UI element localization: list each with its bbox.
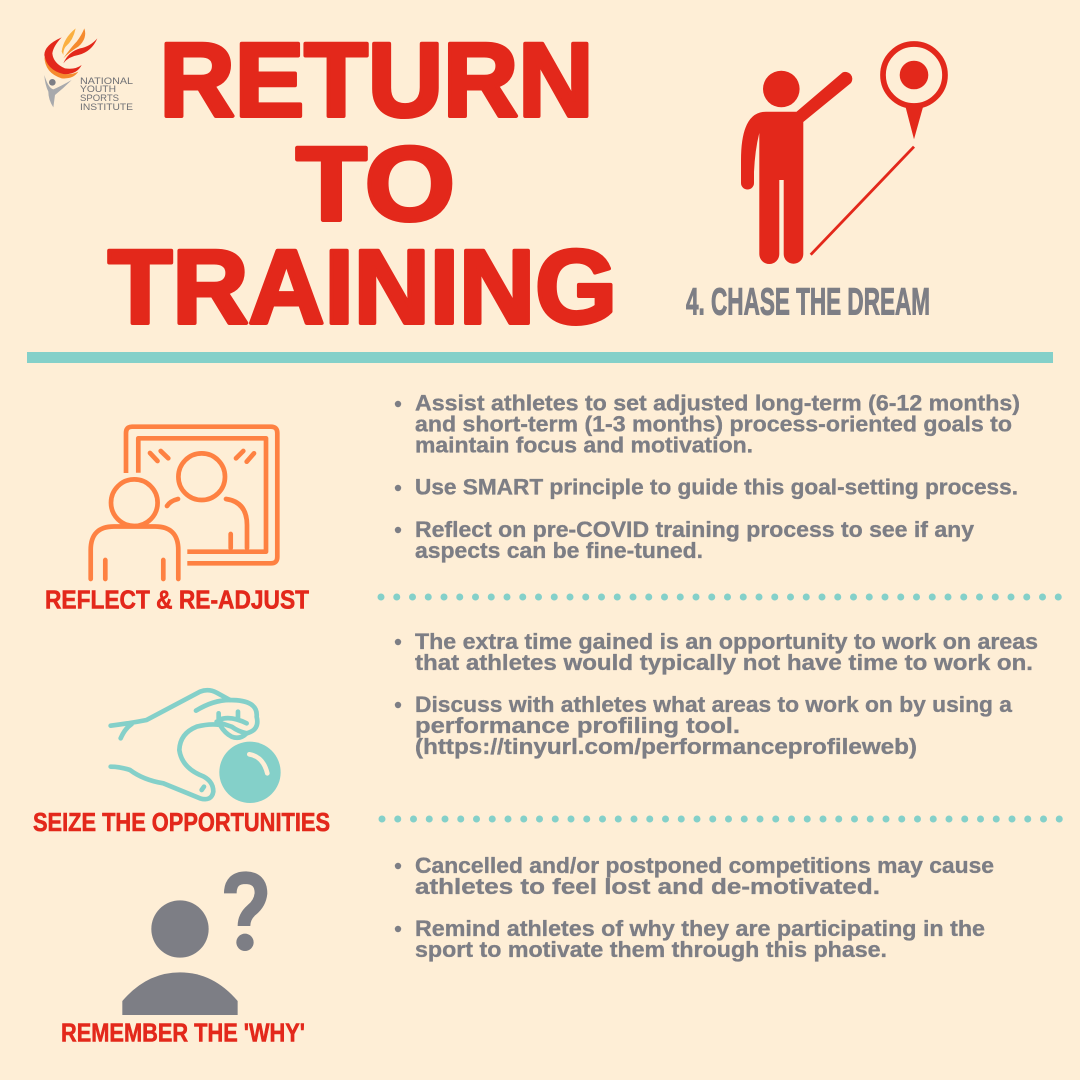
icon: person pointing at target pin bbox=[741, 44, 945, 264]
text block: reflect bullets: and short-term (1-3 months) process-oriented goals to bbox=[415, 412, 1012, 436]
title: RETURN bbox=[160, 22, 594, 139]
logo: National Youth Sports Institute: NATIONAL bbox=[80, 76, 134, 87]
logo: National Youth Sports Institute bbox=[44, 28, 134, 113]
title: TRAINING bbox=[108, 229, 617, 346]
text block: seize bullets: that athletes would typically not have time to work on. bbox=[415, 650, 1033, 675]
text block: why bullets: athletes to feel lost and de-motivated. bbox=[415, 874, 880, 899]
title bbox=[108, 22, 617, 346]
text block: seize bullets: Discuss with athletes what areas to work on by using a bbox=[415, 692, 1013, 717]
text block: why bullets bbox=[395, 853, 994, 962]
text block: reflect bullets: Assist athletes to set adjusted long-term (6-12 months) bbox=[415, 390, 1020, 416]
icon: person with question mark bbox=[122, 878, 261, 1015]
text block: why bullets: Remind athletes of why they are participating in the bbox=[415, 916, 985, 941]
label: reflect and re-adjust: REFLECT & RE-ADJUST bbox=[45, 584, 309, 614]
text block: seize bullets bbox=[395, 629, 1038, 759]
dotted divider bbox=[382, 816, 1062, 822]
logo: National Youth Sports Institute: YOUTH bbox=[80, 84, 116, 95]
text block: seize bullets: (https://tinyurl.com/performanceprofileweb) bbox=[415, 734, 917, 759]
label: seize the opportunities: SEIZE THE OPPORTUNITIES bbox=[33, 807, 330, 837]
text block: reflect bullets: Use SMART principle to guide this goal-setting process. bbox=[415, 474, 1018, 500]
logo: National Youth Sports Institute: INSTITUTE bbox=[80, 102, 133, 113]
dotted divider bbox=[381, 594, 1062, 600]
text block: reflect bullets: aspects can be fine-tuned. bbox=[415, 538, 703, 563]
logo: National Youth Sports Institute: SPORTS bbox=[80, 93, 119, 104]
icon: person facing mirror bbox=[91, 427, 277, 579]
text block: reflect bullets: maintain focus and motivation. bbox=[415, 432, 753, 458]
label: remember the why: REMEMBER THE 'WHY' bbox=[61, 1018, 305, 1048]
icon: hand picking up ball bbox=[111, 690, 281, 803]
text block: why bullets: sport to motivate them through this phase. bbox=[415, 937, 887, 962]
title: TO bbox=[296, 126, 455, 243]
text block: seize bullets: performance profiling tool. bbox=[415, 713, 740, 738]
text block: reflect bullets: Reflect on pre-COVID training process to see if any bbox=[415, 517, 975, 542]
divider bar bbox=[27, 352, 1053, 363]
text block: why bullets: Cancelled and/or postponed competitions may cause bbox=[415, 853, 994, 878]
text block: reflect bullets bbox=[395, 390, 1020, 563]
text block: seize bullets: The extra time gained is an opportunity to work on areas bbox=[415, 629, 1038, 654]
